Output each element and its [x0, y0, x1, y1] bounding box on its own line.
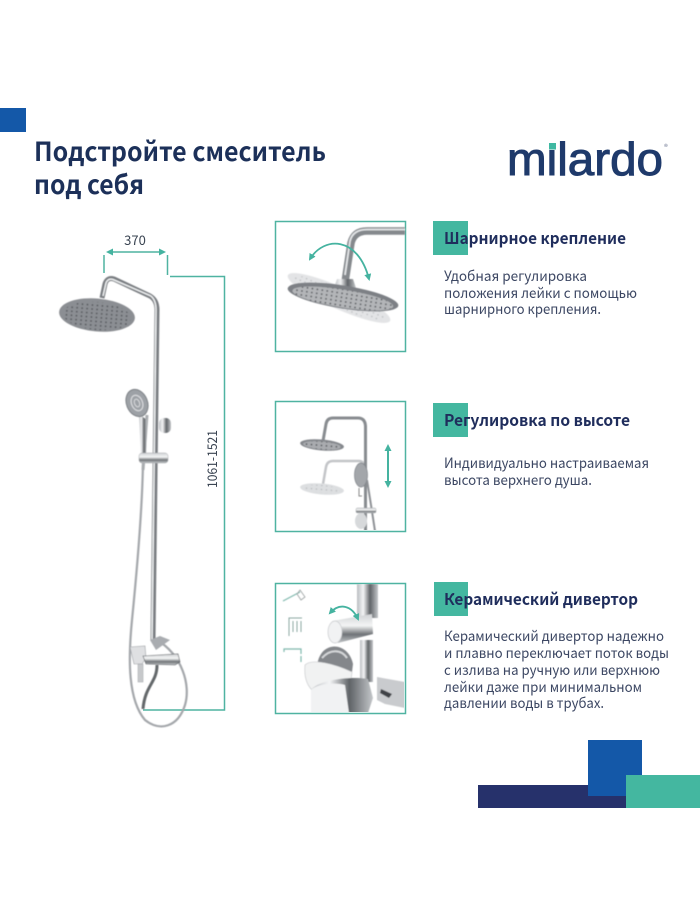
- feature 3: ceramic diverter: и плавно переключает поток воды: [444, 643, 669, 663]
- ghost head: [283, 265, 395, 331]
- title: Подстройте смеситель: [34, 132, 326, 169]
- dimension: height 1061-1521: [143, 276, 224, 710]
- feature 3: ceramic diverter: давлении воды в трубах.: [444, 693, 604, 713]
- title: под себя: [34, 165, 144, 202]
- dimension: height 1061-1521: 1061-1521: [202, 430, 221, 488]
- feature 3: ceramic diverter: лейки даже при минимальном: [444, 677, 642, 697]
- mixer: [150, 636, 170, 650]
- feature 1: swivel mount: Удобная регулировка: [444, 266, 587, 286]
- title: [34, 132, 326, 202]
- riser and arm: [102, 279, 157, 640]
- corner blue square: [0, 108, 26, 132]
- diverter cylinder: [332, 614, 373, 643]
- mixer body: [311, 678, 373, 713]
- spout: [377, 677, 405, 708]
- hand shower: [354, 463, 368, 487]
- main head: [286, 277, 400, 317]
- panel: ceramic diverter: [276, 584, 406, 714]
- wall bracket: [159, 418, 171, 433]
- lever: [305, 662, 352, 690]
- panel: swivel mount: [276, 222, 406, 352]
- feature 1: swivel mount: положения лейки с помощью: [444, 283, 637, 303]
- panel: height adjustment: [276, 402, 406, 532]
- dome: [317, 646, 353, 672]
- logo: milardo: milardo: [507, 133, 663, 185]
- hand shower: [139, 414, 147, 458]
- feature 2: height adjustment: [433, 403, 649, 490]
- feature 3: ceramic diverter: [434, 582, 669, 713]
- riser: [357, 584, 378, 618]
- feature 2: height adjustment: высота верхнего душа.: [444, 470, 592, 490]
- arrow: rotation: [310, 244, 369, 279]
- second rod: [143, 415, 147, 470]
- feature 3: ceramic diverter: Керамический дивертор: [444, 586, 638, 610]
- feature 3: ceramic diverter: Керамический дивертор надежно: [444, 626, 664, 646]
- logo: milardo: ®: [664, 142, 668, 153]
- feature 3: ceramic diverter: с излива на ручную или верхнюю: [444, 660, 660, 680]
- mode icons: [283, 592, 300, 601]
- feature 2: height adjustment: Индивидуально настраиваемая: [444, 453, 649, 473]
- feature 2: height adjustment: Регулировка по высоте: [444, 407, 630, 431]
- feature 1: swivel mount: Шарнирное крепление: [444, 225, 626, 249]
- head shower: [58, 295, 136, 335]
- arrow: up and down: [387, 446, 389, 486]
- hose: [130, 440, 187, 726]
- arm: [286, 230, 405, 317]
- dimension: width 370: [104, 230, 168, 275]
- feature 1: swivel mount: шарнирного крепления.: [444, 299, 601, 319]
- ghost position: [323, 461, 365, 484]
- dimension: width 370: 370: [124, 230, 146, 249]
- product: shower system: [58, 279, 187, 726]
- feature 1: swivel mount: [433, 221, 637, 319]
- arrow: diverter switch: [330, 607, 358, 619]
- upper position: [323, 418, 366, 531]
- slider: [139, 453, 168, 463]
- corner colour blocks: [478, 740, 700, 808]
